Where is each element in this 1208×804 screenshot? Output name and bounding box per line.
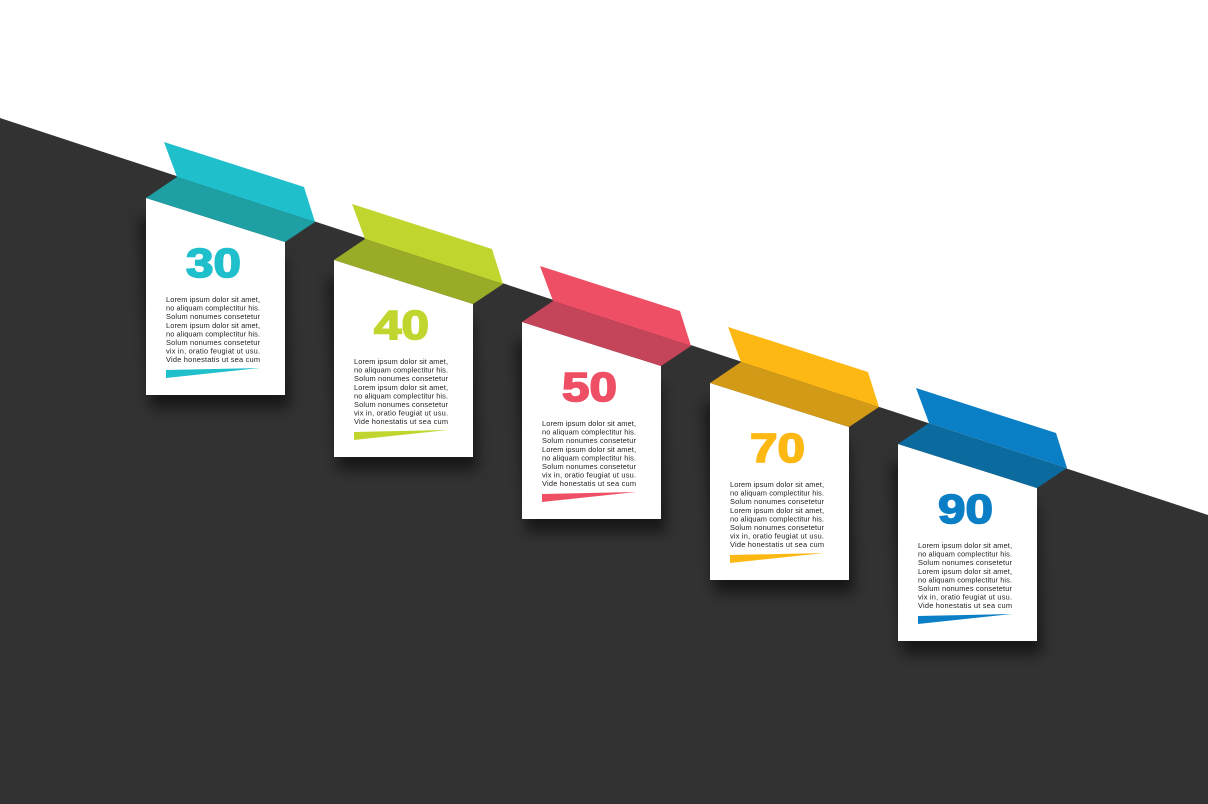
card 50 [516, 266, 691, 532]
number 70: 70 [750, 425, 805, 471]
text block [166, 295, 261, 364]
accent bar [542, 492, 636, 502]
card 90 [892, 388, 1067, 654]
accent bar [730, 553, 824, 563]
accent bar [166, 368, 260, 378]
card 70 [704, 327, 879, 593]
number 40: 40 [374, 302, 429, 348]
text block [918, 541, 1013, 610]
number 90: 90 [938, 486, 993, 532]
number 50: 50 [562, 364, 617, 410]
card 30 [140, 142, 315, 408]
text block [354, 357, 449, 426]
card 40 [328, 204, 503, 470]
text block [542, 419, 637, 488]
accent bar [918, 614, 1012, 624]
text block [730, 480, 825, 549]
accent bar [354, 430, 448, 440]
number 30: 30 [186, 240, 241, 286]
